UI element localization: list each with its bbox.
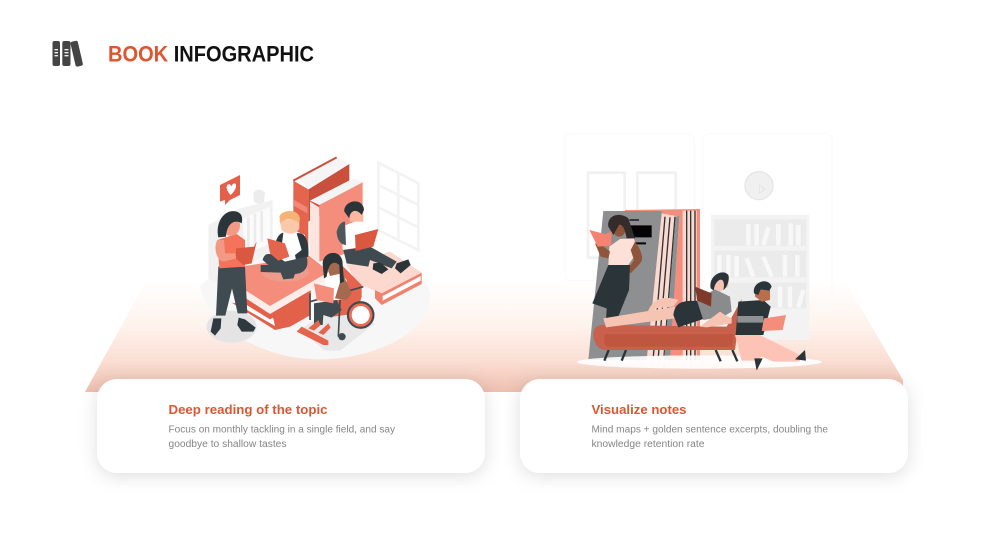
bookshelf <box>711 215 809 340</box>
logo: book icon <box>52 40 83 67</box>
upright books <box>293 157 363 262</box>
windows <box>588 173 676 258</box>
sofa <box>593 299 742 361</box>
card: visualize notes <box>520 379 908 473</box>
standing woman <box>589 215 642 321</box>
boy on book <box>337 201 411 274</box>
shelf <box>208 190 273 283</box>
backdrop blob <box>200 250 430 359</box>
floor ellipse <box>577 355 822 369</box>
right flat book <box>347 252 422 305</box>
faint panels <box>565 134 832 307</box>
illustration: reading on a sofa <box>565 134 832 371</box>
wheelchair child <box>297 253 375 351</box>
title: BOOK INFOGRAPHIC <box>108 42 314 66</box>
card body: goodbye to shallow tastes <box>168 439 286 450</box>
illustration: children reading on books <box>200 157 430 359</box>
clock <box>745 172 773 200</box>
card: deep reading <box>97 379 485 473</box>
heart bubble <box>220 175 240 205</box>
card heading: Deep reading of the topic <box>168 402 328 417</box>
standing girl <box>207 211 257 343</box>
floor gradient trapezoid <box>85 281 903 392</box>
reclining woman <box>603 272 732 327</box>
tall books <box>588 209 700 361</box>
card body: Mind maps + golden sentence excerpts, doubling the <box>592 424 828 436</box>
sitting man <box>735 281 806 371</box>
blond boy <box>261 211 309 282</box>
large flat book <box>229 256 329 330</box>
card body: knowledge retention rate <box>592 439 705 450</box>
card body: Focus on monthly tackling in a single field, and say <box>168 424 395 436</box>
window <box>378 163 418 250</box>
card heading: Visualize notes <box>592 402 686 417</box>
